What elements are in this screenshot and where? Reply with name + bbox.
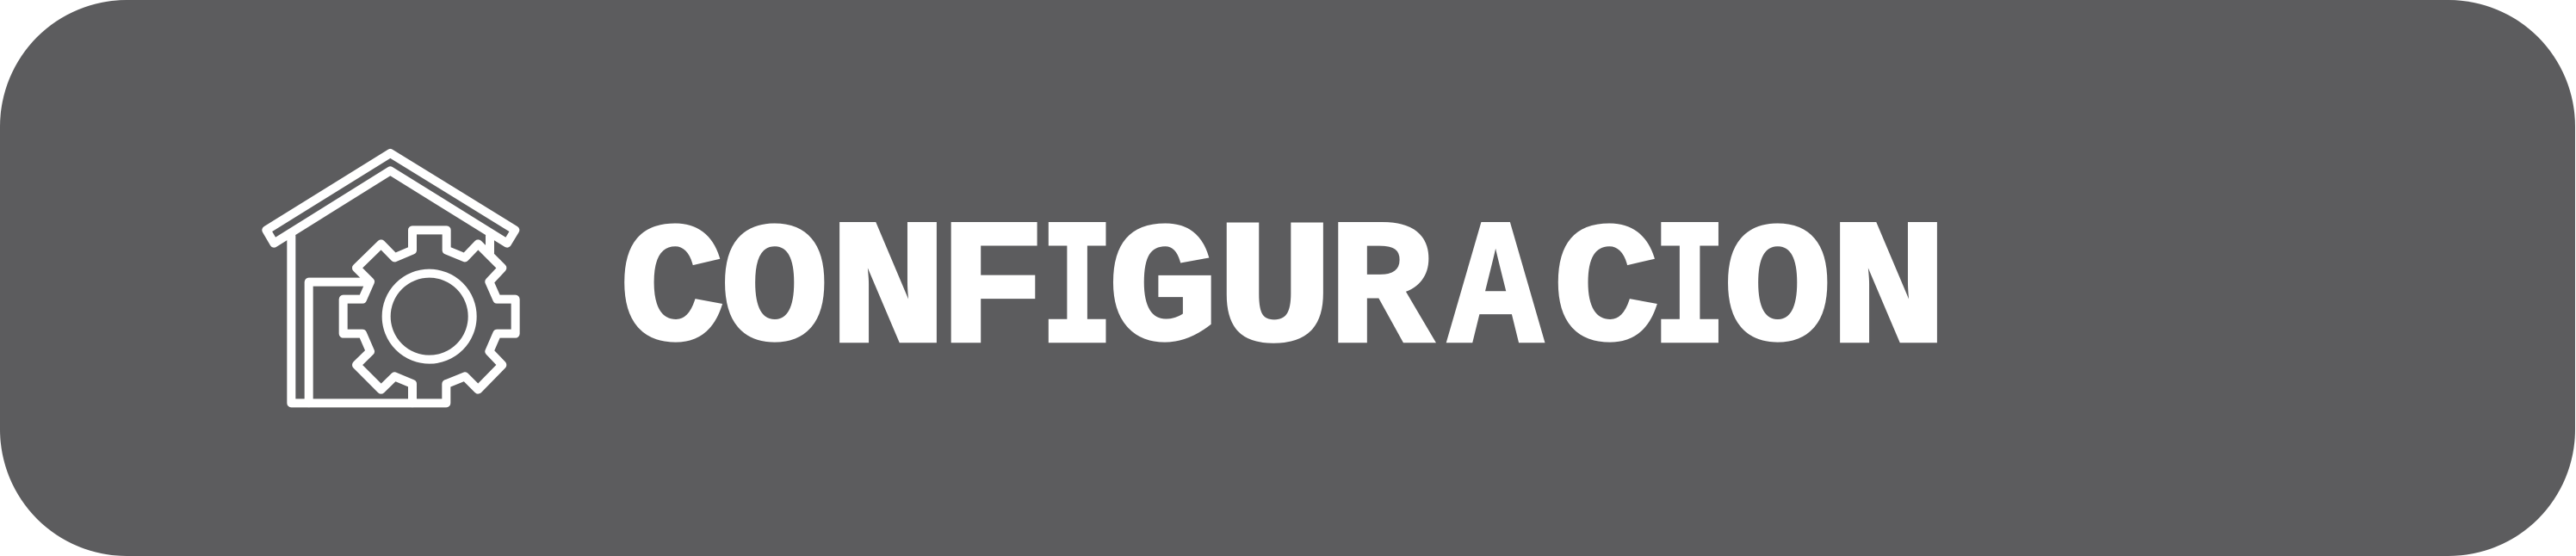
- title: CONFIGURACION: C: [620, 198, 725, 390]
- title: CONFIGURACION: U: [1217, 194, 1334, 392]
- icon part: gear hub: [387, 274, 473, 360]
- title: CONFIGURACION: O: [721, 198, 828, 390]
- title: CONFIGURACION: R: [1328, 194, 1434, 395]
- title: CONFIGURACION: I: [1653, 195, 1726, 395]
- title: CONFIGURACION: N: [828, 193, 948, 394]
- title: CONFIGURACION: O: [1724, 198, 1831, 390]
- icon part: roof: [266, 153, 515, 244]
- title: CONFIGURACION: N: [1829, 193, 1948, 394]
- icon part: door frame: [309, 282, 363, 403]
- title: CONFIGURACION: [620, 193, 1948, 395]
- title: CONFIGURACION: A: [1448, 194, 1543, 395]
- title: CONFIGURACION: F: [938, 195, 1046, 395]
- icon part: house walls: [291, 236, 490, 403]
- icon part: gear outline: [344, 230, 516, 403]
- title: CONFIGURACION: G: [1108, 197, 1218, 390]
- icon: house with gear: [266, 153, 516, 403]
- title: CONFIGURACION: C: [1553, 197, 1660, 390]
- title: CONFIGURACION: I: [1040, 195, 1114, 395]
